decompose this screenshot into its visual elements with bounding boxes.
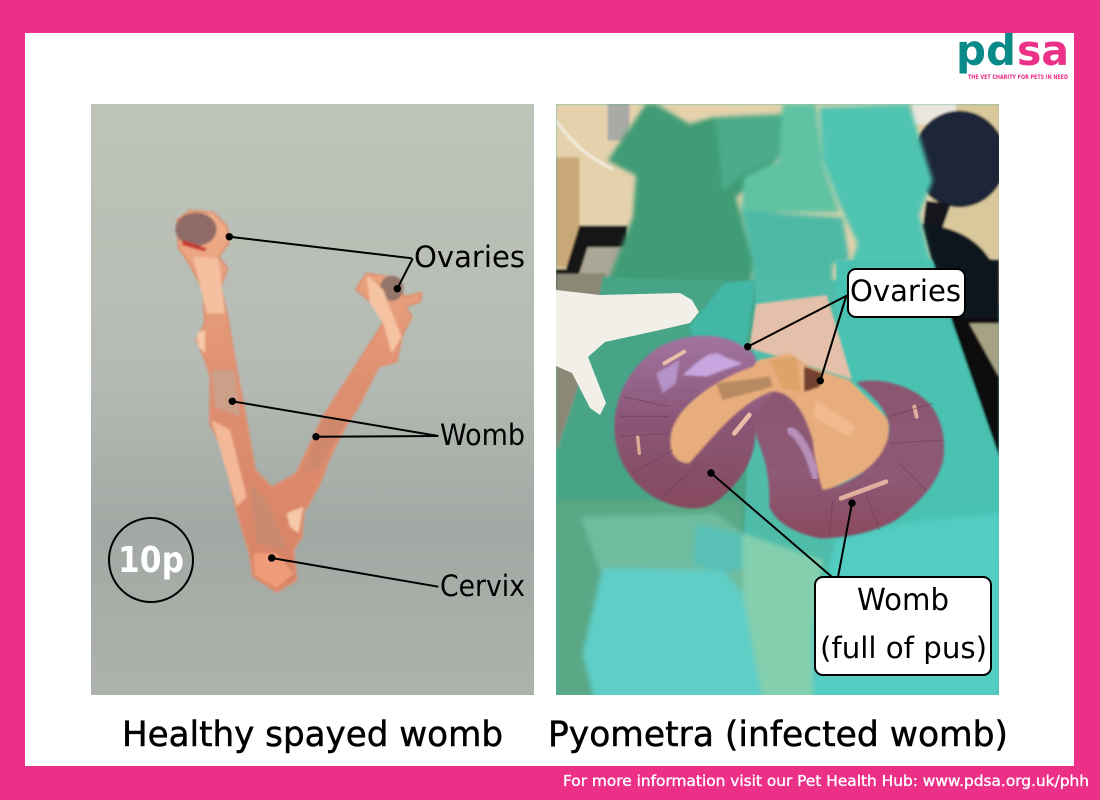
photo background: grey surface bbox=[91, 104, 534, 695]
logo: pdsa: THE VET CHARITY FOR PETS IN NEED bbox=[968, 73, 1068, 81]
photo panel: pyometra bbox=[556, 104, 1006, 700]
glove bbox=[556, 290, 699, 415]
footer link text: For more information visit our Pet Health Hub: www.pdsa.org.uk/phh bbox=[563, 772, 1089, 790]
mid drapes and floor bbox=[556, 260, 999, 560]
callout: Womb (full of pus) bbox=[815, 577, 991, 675]
right lobe bbox=[755, 380, 944, 538]
lilac highlight bbox=[683, 353, 743, 377]
specimen: womb bbox=[175, 211, 422, 592]
scale: 10p coin outline bbox=[109, 518, 193, 602]
label: Cervix: Cervix bbox=[440, 569, 525, 603]
logo: pdsa: sa bbox=[1017, 26, 1069, 75]
scale: 10p coin outline: 10p bbox=[118, 540, 184, 581]
label: Womb: Womb bbox=[440, 418, 525, 452]
skin patch bbox=[749, 295, 852, 379]
heading: Pyometra (infected womb): Pyometra (infected womb) bbox=[548, 715, 1008, 755]
label lines: left photo bbox=[229, 237, 438, 587]
fat streaks bbox=[841, 482, 886, 498]
heading: Healthy spayed womb: Healthy spayed womb bbox=[122, 715, 503, 755]
callout: Ovaries bbox=[848, 269, 965, 317]
upper drapes bbox=[605, 104, 936, 282]
mesentery bbox=[666, 353, 889, 493]
room and chair bbox=[556, 104, 1006, 304]
callout: Ovaries: Ovaries bbox=[850, 274, 961, 308]
label lines: right photo bbox=[711, 295, 852, 577]
left lobe bbox=[614, 336, 773, 508]
callout: Womb (full of pus): (full of pus) bbox=[820, 631, 987, 665]
label dots: left photo bbox=[226, 233, 401, 562]
skin patch and womb bbox=[614, 295, 944, 538]
logo: pdsa bbox=[956, 26, 1069, 81]
callout: Womb (full of pus): Womb bbox=[857, 583, 949, 618]
label: Ovaries: Ovaries bbox=[414, 240, 525, 274]
photo background: drapes and room bbox=[556, 104, 1006, 700]
logo: pdsa: pd bbox=[956, 26, 1016, 75]
photo panel: healthy spayed womb bbox=[91, 104, 534, 695]
veins bbox=[619, 397, 943, 537]
lower drapes bbox=[556, 500, 1000, 700]
label dots: right photo bbox=[707, 343, 856, 507]
